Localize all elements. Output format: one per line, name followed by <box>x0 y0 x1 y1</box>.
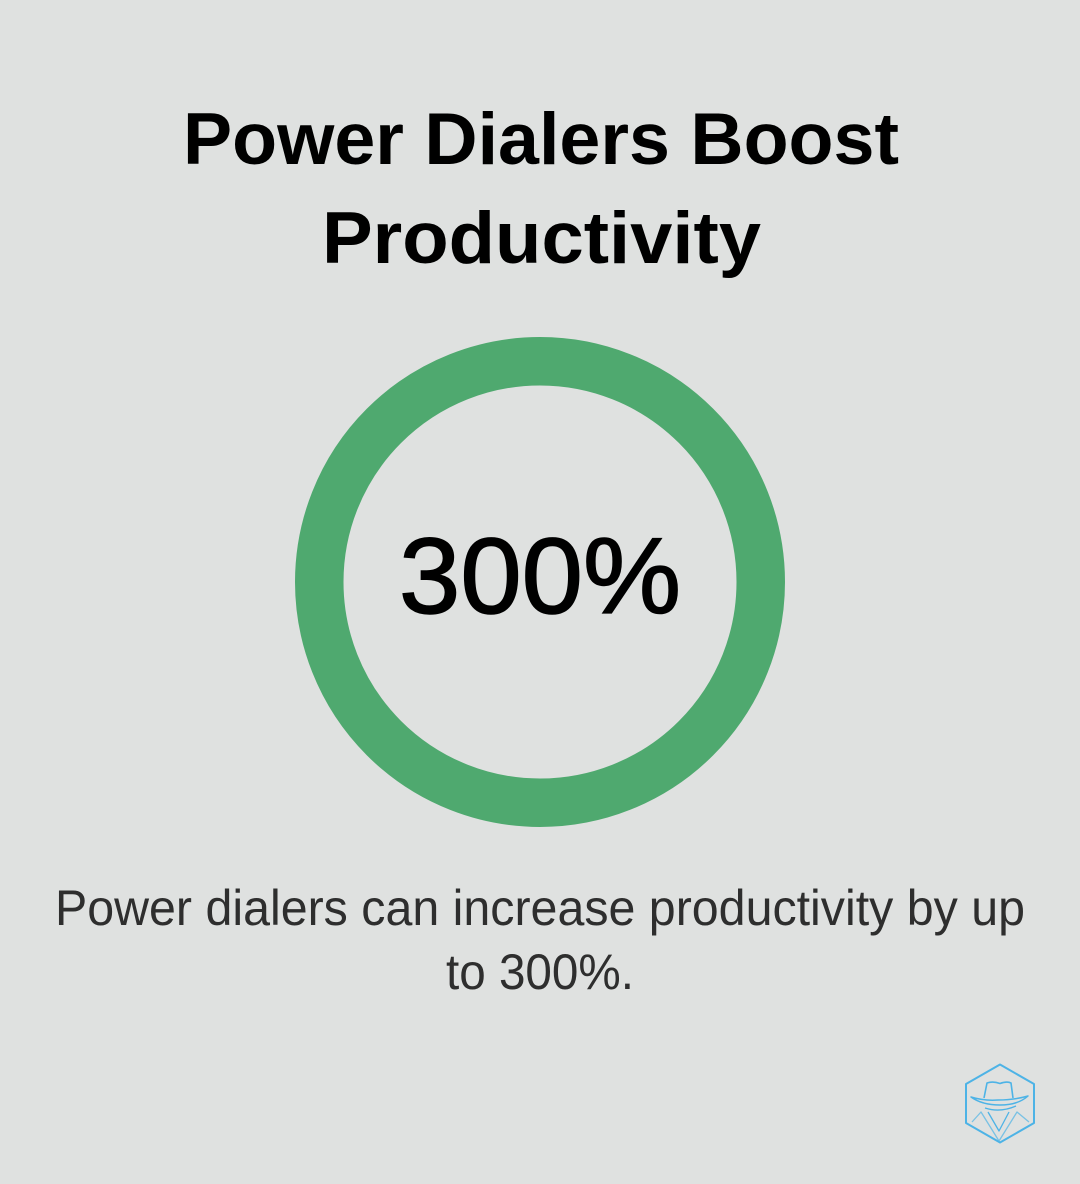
description text <box>55 880 1025 1000</box>
title: Power Dialers Boost <box>183 99 899 180</box>
title: Productivity <box>322 198 761 279</box>
title <box>183 99 899 279</box>
center value: 300% <box>399 515 681 636</box>
donut chart ring <box>319 361 761 803</box>
description text: to 300%. <box>446 944 634 1000</box>
icon: hexagon spy logo <box>966 1064 1034 1142</box>
description text: Power dialers can increase productivity by up <box>55 880 1025 936</box>
